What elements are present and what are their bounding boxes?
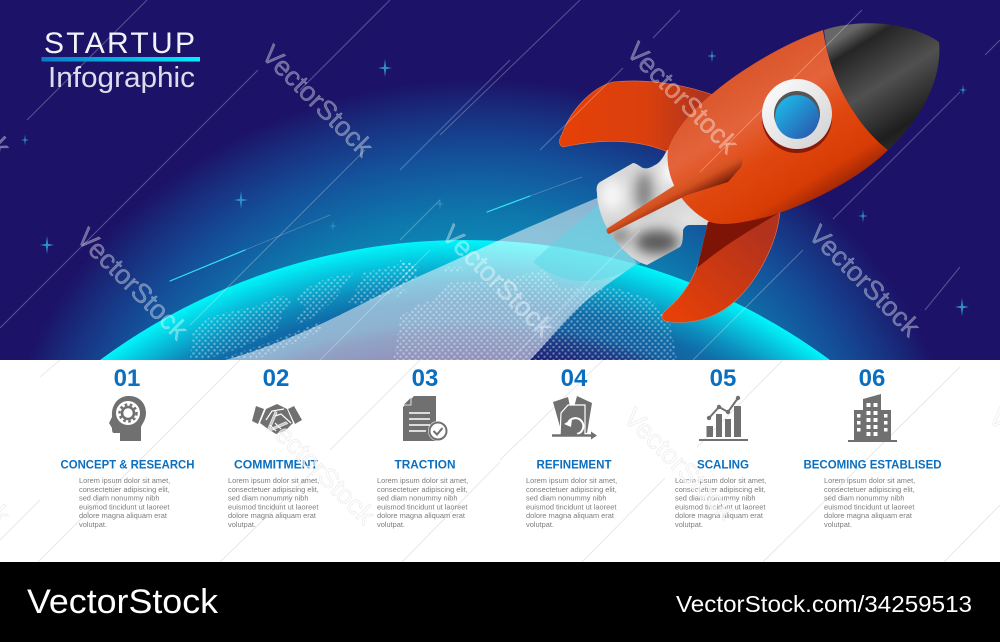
step 04: volutpat.: [526, 520, 554, 529]
lower fin: [662, 212, 780, 322]
black footer bar: [0, 562, 1000, 642]
step 06: euismod tincidunt ut laoreet: [824, 502, 914, 512]
step 03: euismod tincidunt ut laoreet: [377, 502, 467, 512]
icon: handshake: [252, 404, 302, 434]
step 02: COMMITMENT: [234, 458, 319, 472]
step 01: volutpat.: [79, 520, 107, 529]
icon: growth chart: [699, 396, 748, 441]
step 02: volutpat.: [228, 520, 256, 529]
stars: [21, 50, 969, 316]
step 01: sed diam nonummy nibh: [79, 494, 160, 502]
black footer bar: VectorStock.com/34259513: [676, 591, 972, 617]
rocket exhaust beam: [225, 198, 641, 360]
step 01: dolore magna aliquam erat: [79, 511, 167, 520]
step 06: volutpat.: [824, 520, 852, 529]
step 03: TRACTION: [394, 458, 456, 472]
panel diagonal lines: [0, 360, 1000, 562]
step 03: Lorem ipsum dolor sit amet,: [377, 476, 468, 485]
title underline: [42, 57, 200, 62]
watermarks over artwork: [0, 36, 926, 346]
step 02: euismod tincidunt ut laoreet: [228, 502, 318, 512]
step 01: euismod tincidunt ut laoreet: [79, 502, 169, 512]
step 03: consectetuer adipiscing elit,: [377, 485, 468, 494]
watermarks over artwork: VectorStock: [621, 36, 744, 160]
step 04: [526, 365, 617, 529]
step 02: [228, 365, 319, 529]
step 04: Lorem ipsum dolor sit amet,: [526, 476, 617, 485]
step 02: dolore magna aliquam erat: [228, 511, 316, 520]
step 03: sed diam nonummy nibh: [377, 494, 458, 502]
rocket body: [668, 30, 888, 224]
watermarks over artwork: VectorStock: [803, 219, 926, 343]
icon: document with check: [403, 396, 448, 441]
step 06: [804, 365, 942, 529]
step 06: BECOMING ESTABLISED: [804, 458, 942, 472]
step 04: sed diam nonummy nibh: [526, 494, 607, 502]
step 02: sed diam nonummy nibh: [228, 494, 309, 502]
step 02: consectetuer adipiscing elit,: [228, 485, 319, 494]
step 03: 03: [412, 365, 438, 392]
step 01: consectetuer adipiscing elit,: [79, 485, 170, 494]
watermarks over white panel: VectorStock: [618, 402, 741, 526]
title block: Infographic: [48, 62, 195, 94]
lower fin shadow: [697, 212, 780, 268]
watermarks over artwork: VectorStock: [256, 39, 379, 163]
step 05: consectetuer adipiscing elit,: [675, 485, 766, 494]
black footer bar: VectorStock: [27, 583, 219, 621]
planet: [100, 240, 830, 360]
step 04: 04: [561, 365, 588, 392]
white information panel: [0, 360, 1000, 562]
icon: refinement documents: [552, 396, 597, 440]
step 01: Lorem ipsum dolor sit amet,: [79, 476, 170, 485]
icon: head with gear: [109, 396, 146, 441]
step 05: 05: [710, 365, 736, 392]
comet streaks: [170, 177, 582, 281]
step 05: Lorem ipsum dolor sit amet,: [675, 476, 766, 485]
step 05: sed diam nonummy nibh: [675, 494, 756, 502]
step 05: euismod tincidunt ut laoreet: [675, 502, 765, 512]
dotted world map: [190, 260, 677, 360]
step 06: dolore magna aliquam erat: [824, 511, 912, 520]
step 06: 06: [859, 365, 885, 392]
title block: [42, 27, 200, 94]
step 04: euismod tincidunt ut laoreet: [526, 502, 616, 512]
step 06: Lorem ipsum dolor sit amet,: [824, 476, 915, 485]
icon: office building: [848, 394, 897, 442]
rear fin: [560, 81, 716, 152]
step 02: 02: [263, 365, 289, 392]
step 05: volutpat.: [675, 520, 703, 529]
step 05: SCALING: [697, 458, 749, 472]
watermarks over white panel: [0, 402, 1000, 531]
watermarks over artwork: VectorStock: [436, 219, 559, 343]
step 05: dolore magna aliquam erat: [675, 511, 763, 520]
step 03: volutpat.: [377, 520, 405, 529]
step 04: dolore magna aliquam erat: [526, 511, 614, 520]
step 03: [377, 365, 468, 529]
step 01: CONCEPT & RESEARCH: [60, 458, 194, 472]
step 06: consectetuer adipiscing elit,: [824, 485, 915, 494]
porthole: [762, 79, 832, 153]
atmosphere glow: [40, 90, 921, 360]
title block: STARTUP: [44, 27, 195, 60]
diagonal light streaks: [0, 0, 1000, 360]
step 01: [60, 365, 194, 529]
step 02: Lorem ipsum dolor sit amet,: [228, 476, 319, 485]
step 04: consectetuer adipiscing elit,: [526, 485, 617, 494]
engine nozzle: [596, 150, 710, 265]
nose cone: [824, 23, 939, 150]
rocket: [560, 23, 939, 322]
step 01: 01: [114, 365, 140, 392]
step 06: sed diam nonummy nibh: [824, 494, 905, 502]
step 05: [675, 365, 766, 529]
watermarks over white panel: VectorStock: [258, 407, 381, 531]
step 04: REFINEMENT: [536, 458, 612, 472]
space background: [0, 0, 1000, 360]
watermarks over artwork: VectorStock: [71, 222, 194, 346]
step 03: dolore magna aliquam erat: [377, 511, 465, 520]
center fin: [607, 157, 742, 234]
